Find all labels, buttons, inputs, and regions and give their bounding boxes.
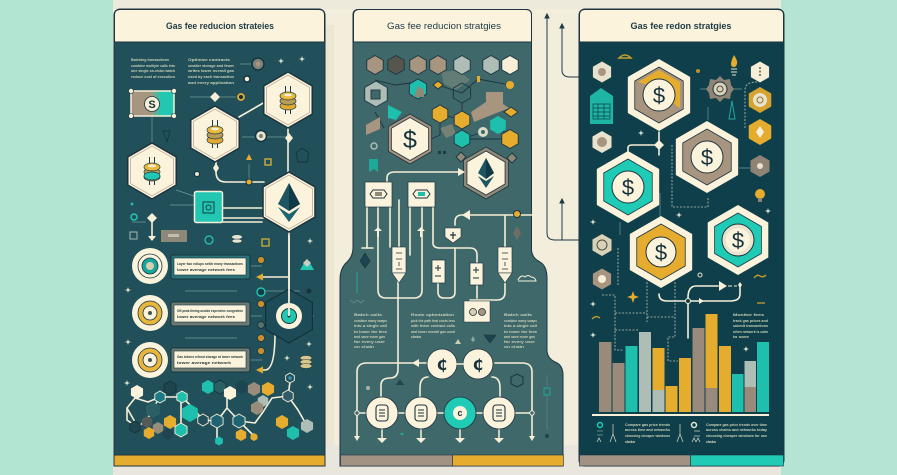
hexagon: dollar teal [597,151,659,223]
text blocks middle: with fewer contract calls [410,324,455,328]
list row 3 [132,342,250,378]
hexagon: ethereum [263,172,315,232]
panel 2: middle column [340,10,564,466]
list row 1: Layer two rollups settle many transactions [177,262,243,266]
text blocks middle: and save more gas [504,335,535,339]
tag: middle right [470,263,483,285]
text blocks middle: into a single call [354,324,387,328]
text blocks top [131,58,235,85]
text blocks top: smaller storage and fewer [188,64,235,68]
text blocks middle: combine many swaps [354,319,387,323]
list row 2: lower average network fees [177,315,235,319]
teal square icon [194,192,222,222]
panel 2 header [354,10,532,42]
panel 1 header [114,10,324,42]
flow lines [354,168,535,443]
hexagon: dollar: $ [403,126,417,154]
text blocks below chart: Compare gas price trends over time [706,423,767,427]
text blocks top: used by each transaction [188,75,234,79]
text blocks below chart: across time and networks [625,428,670,432]
text blocks middle: and save more gas [354,335,385,339]
text blocks below chart: data [625,440,636,444]
top hexagon cluster [365,56,518,172]
icon: banknote: S [148,99,156,111]
panel 3 header: Gas fee redon stratgies [630,21,732,31]
text blocks top: and every application [188,81,234,85]
text blocks below chart: data [706,440,717,444]
hexagon: dollar tan [676,121,738,193]
switch box left [365,182,392,207]
text blocks middle: on chain [354,345,374,349]
text blocks middle: combine many swaps [504,319,537,323]
icon: banknote [128,88,176,118]
hexagon: ethereum [463,147,509,199]
hexagon: coins left [128,143,176,199]
arrows between panels [545,14,579,240]
text blocks middle: and lower overall gas used [411,330,455,334]
text blocks middle: Batch calls [504,313,532,317]
text blocks middle: on chain [504,345,524,349]
yellow arrows [256,274,263,374]
hexagon: dollar tan: $ [701,145,713,170]
panel 3 header [580,10,784,42]
text block beside chart: when network is calm [732,330,768,334]
text blocks below chart: choosing cheaper windows for use [706,434,767,438]
small markers [124,56,313,390]
list row 3: lower average network [177,361,231,365]
text blocks top: Optimize contracts [188,58,230,62]
text blocks middle: to lower the fees [354,330,387,334]
hexagon: dollar teal right [708,205,768,275]
switch box right [408,182,435,207]
text block beside chart: track gas prices and [733,319,768,323]
panel 3: right column [579,9,784,466]
side rings [257,256,314,368]
list row 2: Off-peak timing avoids expensive congestion [177,309,243,313]
connectors and dashed lines [602,82,757,361]
text blocks below chart [625,423,767,444]
bar chart [592,314,769,416]
coin circles upper [427,349,493,379]
hexagon: dollar teal: $ [622,175,634,200]
coin circles upper: ₵ [473,356,483,374]
text blocks middle: for every user [354,340,386,344]
hexagon: coins middle [191,106,239,162]
panel 2 header: Gas fee reducion stratgies [387,21,502,31]
text block beside chart: submit transactions [733,324,768,328]
hexagon: dollar tan yellow [628,59,690,131]
coin circles lower [366,397,515,429]
coin circles lower: c [457,408,463,418]
list row 1 [132,248,250,284]
text blocks middle: Batch calls [354,313,382,317]
two rings box [464,301,490,322]
small decor [350,253,550,438]
text block beside chart: to save [733,335,749,339]
text blocks middle: into a single call [504,324,537,328]
hexagon: dollar teal right: $ [732,228,744,253]
text blocks middle: data [411,335,422,339]
icons below chart [597,422,700,442]
list row 1: lower average network fees [177,268,235,272]
text blocks top: reduce cost of execution [131,75,175,79]
panel 2 footer bar [340,455,564,466]
panel 1: left column [114,9,325,466]
text blocks below chart: choosing cheaper windows [625,434,670,438]
text blocks middle: pick the path that costs less [411,319,455,323]
panel 1 footer bar [114,455,325,466]
text blocks top: Batching transactions [131,58,169,62]
icon: teal table [590,88,613,124]
text blocks middle [354,313,537,349]
text block beside chart [732,313,768,339]
text blocks middle: for every user [504,340,536,344]
text blocks below chart: Compare gas price trends [625,423,670,427]
hexagon: dollar yellow [630,216,692,288]
text blocks below chart: across chains and networks today [706,428,767,432]
tag: middle [432,260,445,283]
text block beside chart: Monitor fees [733,313,764,317]
hexagon network [127,373,313,446]
connectors [132,64,314,370]
hexagon: dollar yellow: $ [655,240,667,265]
tag: left [392,247,406,283]
hexagon: coins top right [264,72,312,128]
panel 1 header: Gas fee reducion strateies [166,21,274,31]
list row 2 [132,295,250,331]
text blocks top: combine multiple calls into [131,64,176,68]
list row 3: Gas tokens refund storage at lower network [177,355,243,359]
small hexagons and icons [590,55,771,352]
coin circles upper: ₵ [437,356,447,374]
tag: right [498,247,512,283]
text blocks middle: Route optimization [411,313,454,317]
shield box [445,226,521,243]
text blocks top: writes lower overall gas [187,69,234,73]
text blocks top: one single on-chain batch [131,69,175,73]
text blocks middle: to lower the fees [504,330,537,334]
panel 3 footer bar [580,455,784,466]
hexagon: dollar [388,114,432,164]
hexagon node with teal circle [266,235,312,343]
hexagon: dollar tan yellow: $ [653,83,665,108]
